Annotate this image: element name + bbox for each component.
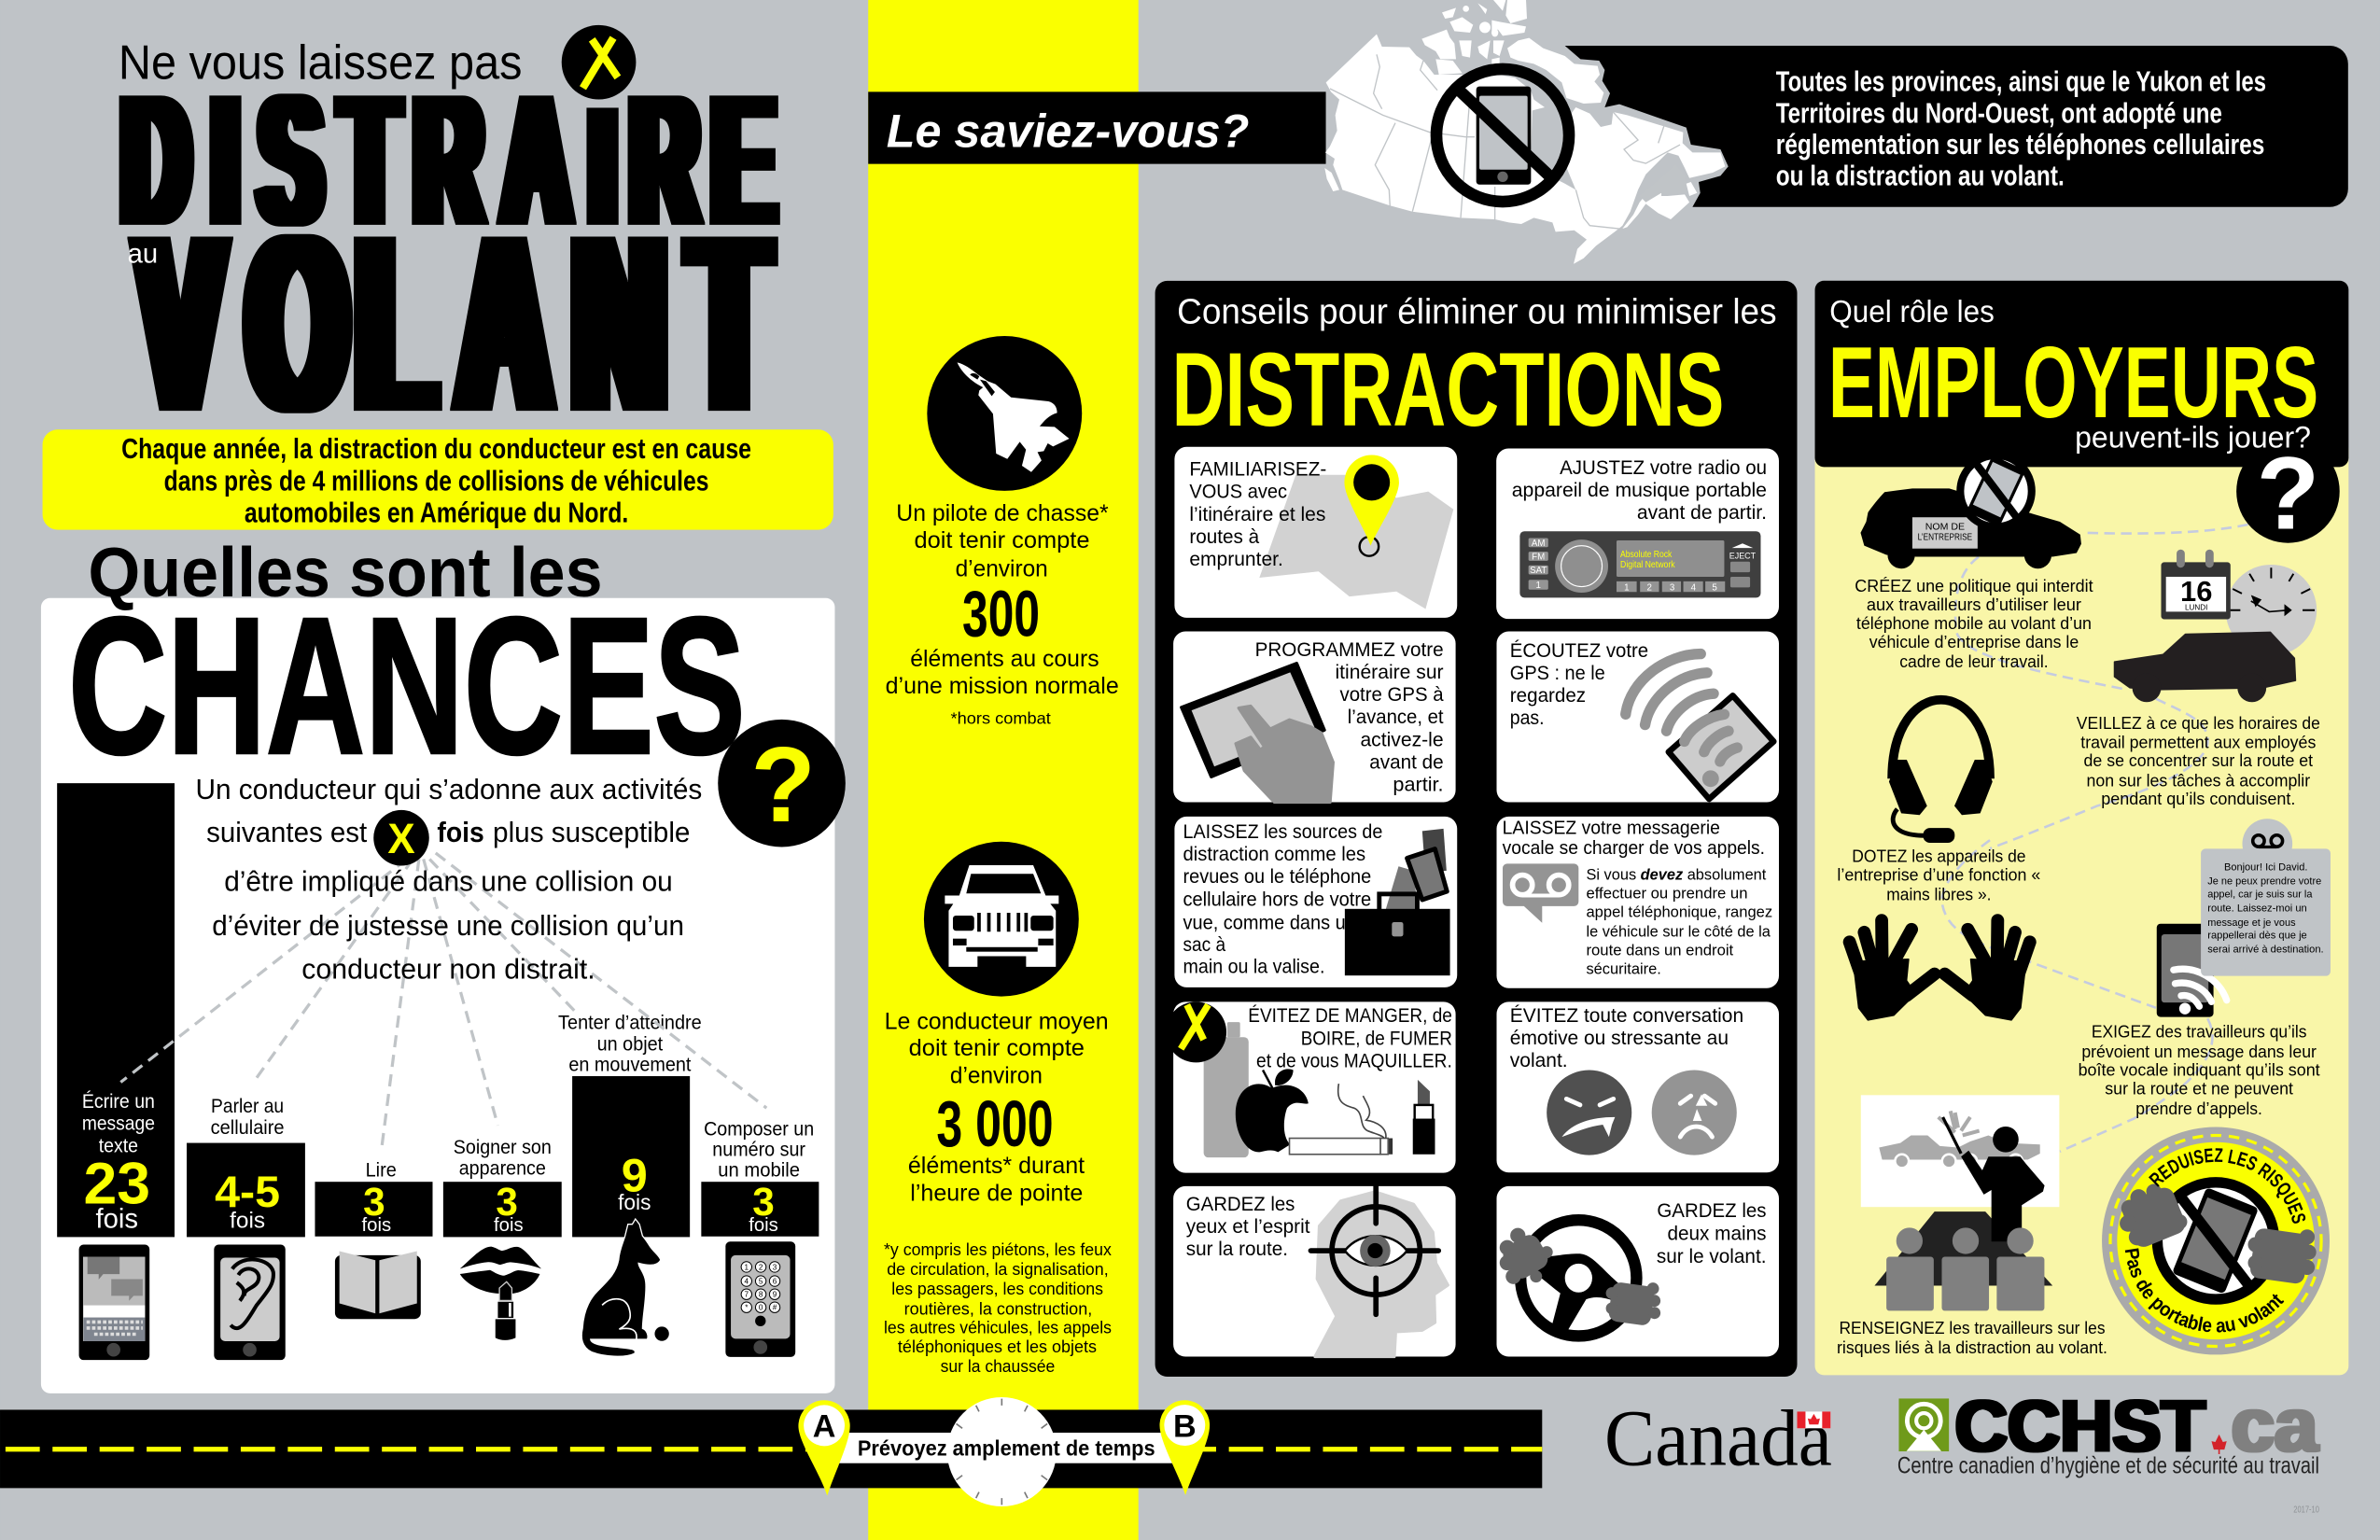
text block: créez: CRÉEZ une politique qui interdit bbox=[1855, 576, 2093, 595]
band: Le saviez-vous bbox=[868, 91, 1326, 164]
icon: fighter jet bbox=[927, 336, 1082, 491]
text block: exigez: sur la route et ne peuvent bbox=[2105, 1079, 2294, 1099]
text block: créez: cadre de leur travail. bbox=[1899, 651, 2049, 671]
card: programmez: partir. bbox=[1393, 774, 1444, 795]
icon: company car: NOM DE bbox=[1925, 522, 1965, 533]
icon: lips and lipstick bbox=[460, 1247, 541, 1340]
card: écoutez: ÉCOUTEZ votre bbox=[1510, 640, 1648, 662]
icon: car radio: 1 bbox=[1536, 581, 1541, 591]
text block: driver bbox=[885, 1009, 1109, 1206]
card: gardez les yeux: GARDEZ les bbox=[1186, 1194, 1295, 1215]
icon: car radio: 5 bbox=[1712, 583, 1717, 594]
card: messagerie: route dans un endroit bbox=[1586, 942, 1733, 959]
icon: station wagon bbox=[2115, 632, 2295, 702]
icon: car radio: 1 bbox=[1624, 583, 1630, 594]
text block: driver: l’heure de pointe bbox=[910, 1180, 1083, 1206]
card: familiarisez: emprunter. bbox=[1189, 549, 1283, 570]
bar chart bbox=[57, 783, 819, 1237]
panel: distractions bbox=[1155, 281, 1798, 1377]
text block: pilot: 300 bbox=[962, 577, 1040, 650]
card: évitez manger: et de vous MAQUILLER. bbox=[1256, 1051, 1452, 1072]
card: laissez sources: LAISSEZ les sources de bbox=[1183, 821, 1382, 843]
bar chart: fois bbox=[95, 1205, 138, 1235]
footnote: les autres véhicules, les appels bbox=[884, 1318, 1112, 1337]
badge: réduisez les risques: Pas de portable au volant bbox=[2124, 1248, 2285, 1333]
panel: provinces regulation: Territoires du Nord-Ouest, ont adopté une bbox=[1776, 97, 2222, 130]
callout: voicemail message: appel, car je suis sur la bbox=[2207, 889, 2313, 900]
icon: clock bbox=[947, 1397, 1057, 1506]
callout: annual statistic: automobiles en Amérique du Nord. bbox=[245, 496, 628, 528]
dashed connectors bbox=[1941, 525, 2248, 1152]
card: gardez les yeux: sur la route. bbox=[1186, 1239, 1288, 1260]
icon: keypad phone: 3 bbox=[773, 1263, 777, 1271]
icon: texting phone bbox=[79, 1245, 149, 1360]
card: messagerie: Si vous devez absolument bbox=[1586, 866, 1767, 884]
text block: pilot bbox=[886, 500, 1119, 728]
icon: keypad phone: * bbox=[745, 1304, 749, 1312]
icon: keypad phone: # bbox=[773, 1304, 777, 1312]
icon: tablet with signal bbox=[1626, 654, 1773, 799]
card: ajustez bbox=[1496, 449, 1779, 619]
bar chart: Écrire un bbox=[82, 1091, 155, 1113]
icon: book bbox=[335, 1252, 421, 1319]
text block: chances intro: conducteur non distrait. bbox=[301, 952, 595, 985]
card: messagerie: vocale se charger de vos appels. bbox=[1503, 838, 1765, 859]
text block: driver: 3 000 bbox=[936, 1087, 1054, 1160]
bar chart: Parler au bbox=[211, 1096, 284, 1117]
icon: keypad phone: 4 bbox=[745, 1277, 749, 1285]
header: ? bbox=[2257, 437, 2319, 552]
icon: X badge bbox=[562, 25, 636, 100]
icon: dog bbox=[581, 1219, 669, 1356]
text block: chances intro bbox=[195, 773, 702, 985]
card: messagerie: le véhicule sur le côté de la bbox=[1586, 922, 1771, 940]
text block: pilot: d’environ bbox=[956, 555, 1048, 581]
text block: dotez: DOTEZ les appareils de bbox=[1852, 847, 2025, 866]
card: gardez les mains: deux mains bbox=[1667, 1224, 1766, 1245]
heading: CHANCES: CHANCES bbox=[68, 579, 746, 795]
card: programmez bbox=[1173, 632, 1456, 802]
card: laissez sources: sac à bbox=[1183, 934, 1225, 956]
bar chart: 3 bbox=[363, 1180, 385, 1224]
card: gardez les yeux bbox=[1173, 1186, 1456, 1357]
icon: training presentation bbox=[1861, 1095, 2059, 1310]
header bbox=[1815, 281, 2348, 552]
title: Ne vous laissez pas bbox=[119, 36, 522, 91]
card: messagerie bbox=[1497, 817, 1779, 988]
bar chart: Composer un bbox=[704, 1118, 814, 1140]
icon: hand bbox=[1236, 707, 1333, 802]
icon: clock bbox=[2226, 565, 2317, 656]
yellow centre column bbox=[868, 0, 1139, 1540]
text block: driver: doit tenir compte bbox=[909, 1035, 1085, 1061]
card: ajustez: AJUSTEZ votre radio ou bbox=[1560, 457, 1767, 479]
card: laissez sources: distraction comme les bbox=[1183, 844, 1365, 865]
icon: calendar: LUNDI bbox=[2185, 603, 2207, 611]
bar chart: fois bbox=[230, 1209, 265, 1234]
icon: calendar bbox=[2161, 550, 2231, 620]
card: écoutez: GPS : ne le bbox=[1510, 663, 1605, 684]
icon: ear on phone bbox=[214, 1245, 286, 1360]
title: VOLANT bbox=[138, 183, 767, 463]
icon: steering wheel bbox=[1499, 1220, 1660, 1336]
bar chart: un mobile bbox=[718, 1159, 800, 1181]
text block: dotez: l’entreprise d’une fonction « bbox=[1837, 865, 2040, 885]
callout: annual statistic: Chaque année, la distraction du conducteur est en cause bbox=[121, 432, 751, 465]
card: évitez conversation bbox=[1497, 1001, 1779, 1172]
icon: question mark disc bbox=[2236, 440, 2340, 543]
icon: car radio: 4 bbox=[1691, 583, 1697, 594]
panel: employeurs bbox=[1814, 280, 2348, 1376]
title bbox=[119, 25, 775, 463]
panel: provinces regulation bbox=[1565, 46, 2348, 207]
card: évitez conversation: émotive ou stressante au bbox=[1510, 1028, 1729, 1049]
card: laissez sources: main ou la valise. bbox=[1183, 957, 1324, 978]
card: laissez sources: cellulaire hors de votre bbox=[1183, 889, 1371, 911]
card: programmez: PROGRAMMEZ votre bbox=[1255, 639, 1444, 661]
text block: pilot: Un pilote de chasse* bbox=[896, 500, 1109, 526]
card: laissez sources: vue, comme dans un bbox=[1183, 912, 1356, 933]
icon: keypad phone bbox=[725, 1241, 795, 1357]
text block: veillez: non sur les tâches à accomplir bbox=[2086, 770, 2310, 790]
bar chart: fois bbox=[749, 1215, 778, 1236]
text block: veillez: travail permettent aux employés bbox=[2080, 732, 2316, 751]
icon: keypad phone: 1 bbox=[745, 1263, 749, 1271]
card: évitez manger bbox=[1166, 1001, 1456, 1173]
card: familiarisez: FAMILIARISEZ- bbox=[1189, 459, 1326, 481]
card: ajustez: appareil de musique portable bbox=[1512, 480, 1767, 501]
header: Quel rôle les bbox=[1829, 295, 1995, 329]
title: au bbox=[128, 239, 158, 269]
text block: exigez: boîte vocale indiquant qu’ils sont bbox=[2079, 1060, 2320, 1080]
badge: réduisez les risques: REDUISEZ LES RISQUES bbox=[2149, 1148, 2305, 1224]
panel: provinces regulation: ou la distraction au volant. bbox=[1776, 159, 2065, 191]
card: laissez sources bbox=[1174, 817, 1457, 987]
text block: chances intro: d’être impliqué dans une collision ou bbox=[224, 865, 673, 898]
text block: chances intro: fois bbox=[437, 816, 484, 848]
bar chart: 4-5 bbox=[215, 1167, 280, 1216]
text block: exigez: EXIGEZ des travailleurs qu’ils bbox=[2092, 1022, 2306, 1042]
callout: voicemail message: rappellerai dès que je bbox=[2207, 931, 2307, 942]
footnote: routières, la construction, bbox=[904, 1298, 1092, 1318]
icon: car radio: FM bbox=[1532, 553, 1545, 563]
band: Le saviez-vous: Le saviez-vous? bbox=[887, 105, 1249, 158]
callout: voicemail message: message et je vous bbox=[2207, 917, 2296, 929]
callout: voicemail message: route. Laissez-moi un bbox=[2207, 903, 2307, 915]
icon: keypad phone: 6 bbox=[773, 1277, 777, 1285]
panel: chances bbox=[41, 533, 846, 1393]
text block: pilot: doit tenir compte bbox=[915, 527, 1090, 553]
icon: car radio: SAT bbox=[1530, 566, 1547, 576]
heading: Quelles sont les: Quelles sont les bbox=[88, 533, 603, 611]
icon: headset bbox=[1889, 700, 1993, 843]
icon: car radio: 3 bbox=[1670, 583, 1674, 594]
logo: CCHST bbox=[1897, 1383, 2319, 1478]
icon: lipstick bbox=[1413, 1080, 1435, 1155]
bar chart: cellulaire bbox=[211, 1117, 285, 1139]
card: programmez: l’avance, et bbox=[1348, 707, 1444, 728]
bar chart: Lire bbox=[366, 1159, 397, 1181]
icon: head with target bbox=[1310, 1186, 1448, 1357]
text block: renseignez: risques liés à la distraction au volant. bbox=[1837, 1337, 2107, 1357]
bar chart: 3 bbox=[496, 1180, 518, 1224]
text block: chances intro: X bbox=[387, 815, 415, 862]
card: programmez: avant de bbox=[1369, 751, 1444, 773]
text block: créez: aux travailleurs d’utiliser leur bbox=[1867, 595, 2081, 614]
icon: X badge bbox=[1166, 1001, 1226, 1062]
text block: chances intro: Un conducteur qui s’adonne aux activités bbox=[195, 773, 702, 805]
header: peuvent-ils jouer? bbox=[2075, 421, 2311, 455]
footnote: sur la chaussée bbox=[941, 1356, 1055, 1376]
text block: driver: d’environ bbox=[950, 1063, 1043, 1089]
bar chart: 23 bbox=[83, 1152, 150, 1217]
footnote: téléphoniques et les objets bbox=[898, 1337, 1097, 1356]
icon: keypad phone: 9 bbox=[773, 1291, 777, 1299]
pin B bbox=[1159, 1400, 1210, 1495]
bar chart: numéro sur bbox=[712, 1139, 805, 1160]
heading: DISTRACTIONS: DISTRACTIONS bbox=[1171, 330, 1724, 448]
card: gardez les mains bbox=[1497, 1186, 1779, 1357]
text block: veillez bbox=[2077, 713, 2320, 808]
card: évitez manger: ÉVITEZ DE MANGER, de bbox=[1248, 1005, 1452, 1027]
text block: créez: téléphone mobile au volant d’un bbox=[1856, 613, 2092, 633]
icon: keypad phone: 0 bbox=[759, 1304, 763, 1312]
icon: car radio: Digital Network bbox=[1620, 560, 1675, 570]
text block: dotez: mains libres ». bbox=[1886, 884, 1992, 903]
card: gardez les mains: GARDEZ les bbox=[1657, 1200, 1766, 1222]
bar chart: 9 bbox=[622, 1149, 648, 1202]
callout: voicemail message bbox=[2201, 819, 2331, 976]
text block: veillez: de se concentrer sur la route et bbox=[2084, 750, 2314, 770]
card: familiarisez: routes à bbox=[1189, 526, 1259, 548]
bar chart: fois bbox=[618, 1190, 651, 1214]
bar chart: fois bbox=[362, 1215, 391, 1236]
icon: no phone bbox=[1436, 69, 1569, 202]
icon: keypad phone: 5 bbox=[759, 1277, 763, 1285]
callout: annual statistic bbox=[43, 429, 833, 530]
card: évitez manger: BOIRE, de FUMER bbox=[1301, 1029, 1452, 1050]
bar chart: Tenter d’atteindre bbox=[558, 1013, 702, 1034]
footnote: les passagers, les conditions bbox=[891, 1279, 1103, 1298]
card: messagerie: sécuritaire. bbox=[1586, 960, 1661, 978]
icon: question mark bbox=[718, 720, 846, 847]
card: programmez: itinéraire sur bbox=[1335, 662, 1444, 683]
icon: angry face bbox=[1547, 1071, 1631, 1155]
callout: voicemail message: Je ne peux prendre votre bbox=[2207, 876, 2321, 888]
bar chart: apparence bbox=[459, 1158, 546, 1180]
icon: keypad phone: 8 bbox=[759, 1291, 763, 1299]
card: familiarisez: VOUS avec bbox=[1189, 482, 1287, 503]
text block: exigez: prévoient un message dans leur bbox=[2081, 1042, 2317, 1061]
text block: créez bbox=[1855, 576, 2093, 671]
text block: veillez: pendant qu’ils conduisent. bbox=[2101, 789, 2295, 808]
text block: chances intro: suivantes est bbox=[206, 816, 368, 848]
icon: car radio: AM bbox=[1532, 539, 1546, 549]
icon: SUV front bbox=[924, 842, 1079, 997]
pin A bbox=[798, 1400, 850, 1495]
road banner bbox=[0, 1397, 1542, 1506]
icon: car radio: 2 bbox=[1647, 583, 1652, 594]
icon: apple bbox=[1236, 1069, 1309, 1152]
card: gardez les mains: sur le volant. bbox=[1657, 1246, 1766, 1267]
panel: provinces regulation: réglementation sur les téléphones cellulaires bbox=[1776, 128, 2264, 161]
footnote: *y compris les piétons, les feux bbox=[884, 1239, 1113, 1259]
bar chart: message bbox=[82, 1113, 155, 1135]
map of Canada bbox=[1324, 0, 1725, 264]
callout: voicemail message: Bonjour! Ici David. bbox=[2224, 861, 2307, 873]
bar chart: Soigner son bbox=[454, 1137, 552, 1158]
callout: voicemail message: serai arrivé à destination. bbox=[2207, 945, 2324, 956]
icon: cigarette bbox=[1290, 1084, 1393, 1155]
footnote bbox=[884, 1239, 1113, 1376]
text block: chances intro: d’éviter de justesse une collision qu’un bbox=[212, 909, 684, 942]
text block: chances intro: plus susceptible bbox=[493, 816, 690, 848]
card: messagerie: LAISSEZ votre messagerie bbox=[1503, 818, 1720, 838]
card: programmez: votre GPS à bbox=[1340, 684, 1444, 706]
badge: réduisez les risques bbox=[2102, 1127, 2330, 1355]
text block: renseignez: RENSEIGNEZ les travailleurs sur les bbox=[1839, 1318, 2106, 1337]
text block: renseignez bbox=[1837, 1318, 2107, 1357]
text block: exigez bbox=[2079, 1022, 2320, 1118]
text block: exigez: prendre d’appels. bbox=[2135, 1099, 2262, 1118]
icon: calendar: 16 bbox=[2180, 575, 2212, 608]
pin B: B bbox=[1173, 1408, 1197, 1444]
card: gardez les yeux: yeux et l’esprit bbox=[1186, 1216, 1310, 1238]
callout: annual statistic: dans près de 4 millions de collisions de véhicules bbox=[164, 464, 708, 497]
text block: créez: véhicule d’entreprise dans le bbox=[1869, 632, 2079, 651]
card: écoutez bbox=[1497, 632, 1779, 802]
card: évitez conversation: volant. bbox=[1510, 1050, 1568, 1071]
bar chart: un objet bbox=[597, 1033, 663, 1055]
bar chart: en mouvement bbox=[568, 1054, 692, 1075]
card: ajustez: avant de partir. bbox=[1637, 502, 1767, 524]
text block: pilot: éléments au cours bbox=[910, 646, 1099, 672]
bar chart: fois bbox=[494, 1215, 524, 1236]
icon: keypad phone: 2 bbox=[759, 1263, 763, 1271]
text block: veillez: VEILLEZ à ce que les horaires de bbox=[2077, 713, 2320, 733]
icon: phone with signal bbox=[2157, 924, 2227, 1017]
card: messagerie: appel téléphonique, rangez bbox=[1586, 903, 1772, 921]
logo: CCHST: ca bbox=[2232, 1383, 2318, 1468]
card: écoutez: pas. bbox=[1510, 707, 1545, 729]
heading: conseils: Conseils pour éliminer ou minimiser les bbox=[1177, 291, 1777, 331]
icon: tablet bbox=[1182, 664, 1324, 777]
icon: question mark: ? bbox=[750, 726, 816, 845]
dashed leader lines bbox=[120, 853, 766, 1146]
date code: 2017-10 bbox=[2293, 1505, 2319, 1516]
card: messagerie: effectuer ou prendre un bbox=[1586, 885, 1747, 903]
text block: driver: Le conducteur moyen bbox=[885, 1009, 1109, 1035]
title: DISTRAIRE bbox=[122, 58, 775, 264]
pin A: A bbox=[813, 1408, 835, 1444]
icon: sad face bbox=[1652, 1071, 1737, 1155]
text block: pilot: *hors combat bbox=[951, 709, 1051, 728]
icon: company car bbox=[1860, 455, 2081, 568]
icon: keypad phone: 7 bbox=[745, 1291, 749, 1299]
icon: voicemail bubble bbox=[1503, 863, 1578, 923]
icon: bottle bbox=[1204, 1022, 1249, 1157]
icon: two hands bbox=[1850, 920, 2030, 1020]
text block: pilot: d’une mission normale bbox=[886, 673, 1119, 699]
text block: dotez bbox=[1837, 847, 2040, 903]
logo: CCHST: CCHST bbox=[1955, 1385, 2205, 1467]
card: familiarisez: l’itinéraire et les bbox=[1189, 504, 1325, 525]
card: familiarisez bbox=[1174, 447, 1457, 618]
logo: Canada: Canada bbox=[1604, 1393, 1832, 1482]
bar chart: texte bbox=[99, 1135, 138, 1156]
card: laissez sources: revues ou le téléphone bbox=[1183, 866, 1371, 888]
icon: car radio: EJECT bbox=[1729, 551, 1757, 560]
bar chart: 3 bbox=[752, 1180, 775, 1224]
text block: driver: éléments* durant bbox=[908, 1153, 1085, 1179]
label: plan time: Prévoyez amplement de temps bbox=[858, 1435, 1155, 1460]
footnote: de circulation, la signalisation, bbox=[887, 1259, 1109, 1279]
icon: briefcase, magazine and phone bbox=[1345, 829, 1450, 975]
icon: car radio bbox=[1519, 531, 1760, 597]
card: écoutez: regardez bbox=[1510, 685, 1586, 707]
card: évitez conversation: ÉVITEZ toute conversation bbox=[1510, 1005, 1743, 1027]
icon: company car: L’ENTREPRISE bbox=[1918, 532, 1972, 543]
icon: car radio: Absolute Rock bbox=[1620, 550, 1672, 560]
card: programmez: activez-le bbox=[1360, 729, 1444, 750]
